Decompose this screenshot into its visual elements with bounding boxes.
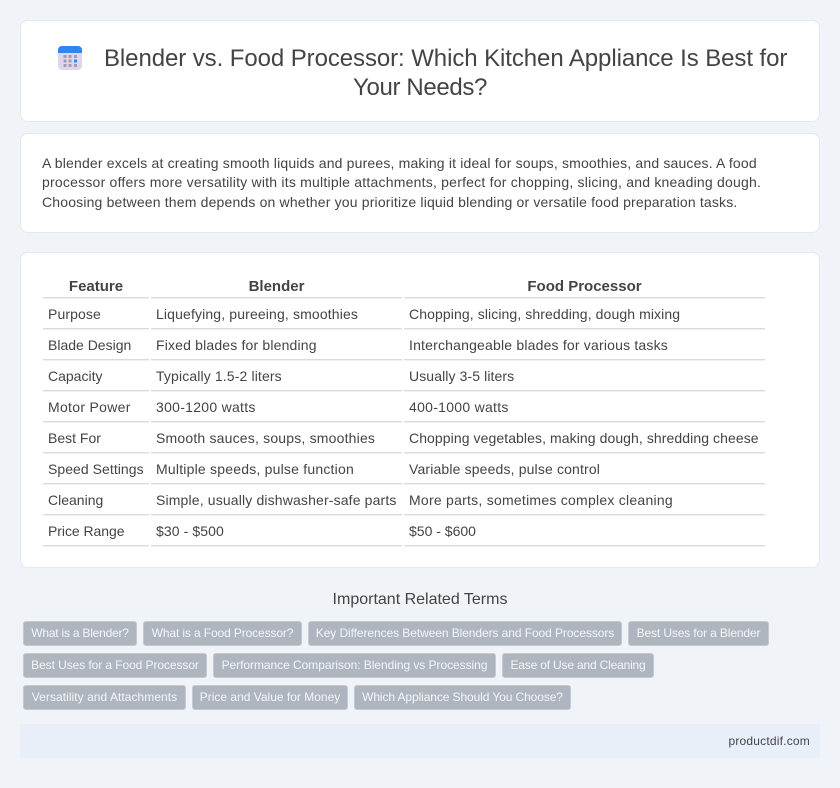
intro line 2: processor offers more versatility with its multiple attachments, perfect for chopping, slicing, and kneading dough.: [42, 174, 761, 190]
Speed blender: Multiple speeds, pulse function: [156, 461, 354, 477]
tag: What is a Food Processor?: [152, 626, 293, 640]
tag group: related terms: [23, 621, 769, 710]
footer bar: [20, 724, 820, 758]
Cleaning blender: Simple, usually dishwasher-safe parts: [156, 492, 397, 508]
row: Price Range: Price Range: [48, 523, 124, 539]
Best For blender: Smooth sauces, soups, smoothies: [156, 430, 375, 446]
tag: [23, 685, 186, 710]
table header: Food Processor: Food Processor: [527, 278, 642, 295]
intro line 1: A blender excels at creating smooth liquids and purees, making it ideal for soups, smoothies, and sauces. A food: [42, 155, 757, 171]
Price food processor: $50 - $600: [409, 523, 476, 539]
row: Purpose: Purpose: [48, 306, 101, 322]
tag: [143, 621, 302, 646]
table header: Blender: Blender: [249, 278, 304, 295]
title second line: Your Needs?: [353, 74, 487, 101]
tag: [23, 621, 137, 646]
Speed food processor: Variable speeds, pulse control: [409, 461, 600, 477]
panel: title header: [20, 20, 820, 122]
row: Motor Power: Motor Power: [48, 399, 131, 415]
tag: [502, 653, 654, 678]
Best For food processor: Chopping vegetables, making dough, shredding cheese: [409, 430, 759, 446]
intro line 3: Choosing between them depends on whether you prioritize liquid blending or versatile food preparation tasks.: [42, 194, 737, 210]
tag: Best Uses for a Blender: [637, 626, 760, 640]
Motor food processor: 400-1000 watts: [409, 399, 509, 415]
Price blender: $30 - $500: [156, 523, 224, 539]
panel: comparison table: [20, 252, 820, 568]
tag: [192, 685, 348, 710]
panel: introduction: [20, 133, 820, 233]
footer text: productdif.com: [728, 734, 810, 748]
heading: Important Related Terms: Important Related Terms: [333, 591, 507, 608]
tag: What is a Blender?: [31, 626, 129, 640]
icon: calendar grid: [58, 46, 82, 70]
tag: [213, 653, 496, 678]
tag: Which Appliance Should You Choose?: [362, 690, 563, 704]
tag: [308, 621, 622, 646]
row: Blade Design: Blade Design: [48, 337, 131, 353]
Purpose blender: Liquefying, pureeing, smoothies: [156, 306, 358, 322]
tag: Key Differences Between Blenders and Food Processors: [316, 626, 614, 640]
row: Best For: Best For: [48, 430, 101, 446]
tag: Price and Value for Money: [200, 690, 340, 704]
Cleaning food processor: More parts, sometimes complex cleaning: [409, 492, 673, 508]
tag: [354, 685, 571, 710]
Blade food processor: Interchangeable blades for various tasks: [409, 337, 668, 353]
tag: Performance Comparison: Blending vs Processing: [222, 658, 487, 672]
table header: Feature: Feature: [69, 278, 123, 295]
title: Blender vs. Food Processor: Which Kitchen Appliance Is Best for: [104, 45, 787, 72]
tag: Best Uses for a Food Processor: [31, 658, 199, 672]
row: Capacity: Capacity: [48, 368, 102, 384]
Capacity food processor: Usually 3-5 liters: [409, 368, 514, 384]
Blade blender: Fixed blades for blending: [156, 337, 317, 353]
tag: [628, 621, 769, 646]
tag: Versatility and Attachments: [32, 690, 177, 704]
Motor blender: 300-1200 watts: [156, 399, 256, 415]
Capacity blender: Typically 1.5-2 liters: [156, 368, 282, 384]
tag: Ease of Use and Cleaning: [510, 658, 646, 672]
tag: [23, 653, 207, 678]
row: Speed Settings: Speed Settings: [48, 461, 144, 477]
row: Cleaning: Cleaning: [48, 492, 103, 508]
Purpose food processor: Chopping, slicing, shredding, dough mixing: [409, 306, 680, 322]
